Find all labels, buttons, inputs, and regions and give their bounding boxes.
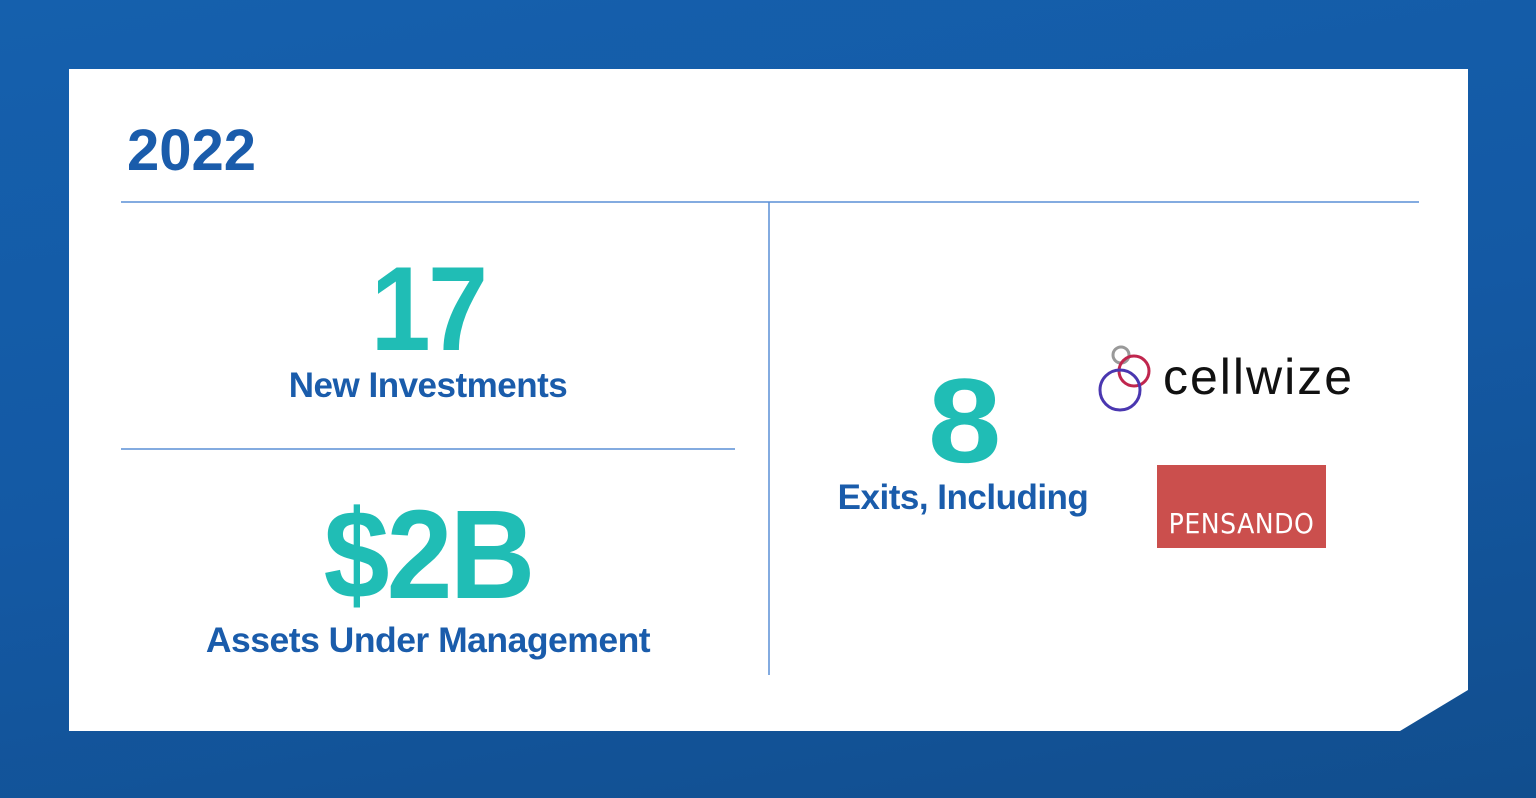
logo: cellwize: [1098, 346, 1354, 412]
label exits: Exits, Including: [838, 478, 1088, 517]
title: 2022: 2022: [127, 118, 256, 183]
number $2B: $2B: [324, 484, 532, 625]
label assets: Assets Under Management: [206, 620, 650, 660]
stat: $2B AUM: [206, 484, 650, 660]
logo: pensando: PENSANDO: [1169, 507, 1314, 540]
stat: 17 new investments: [289, 242, 567, 405]
number 17: 17: [371, 242, 485, 376]
logo: pensando: [1157, 465, 1326, 548]
stat: 8 exits: [838, 354, 1088, 517]
wordmark: cellwize: [1163, 349, 1354, 405]
label new investments: New Investments: [289, 366, 567, 405]
icon: circles: [1098, 346, 1150, 412]
number 8: 8: [928, 354, 998, 488]
